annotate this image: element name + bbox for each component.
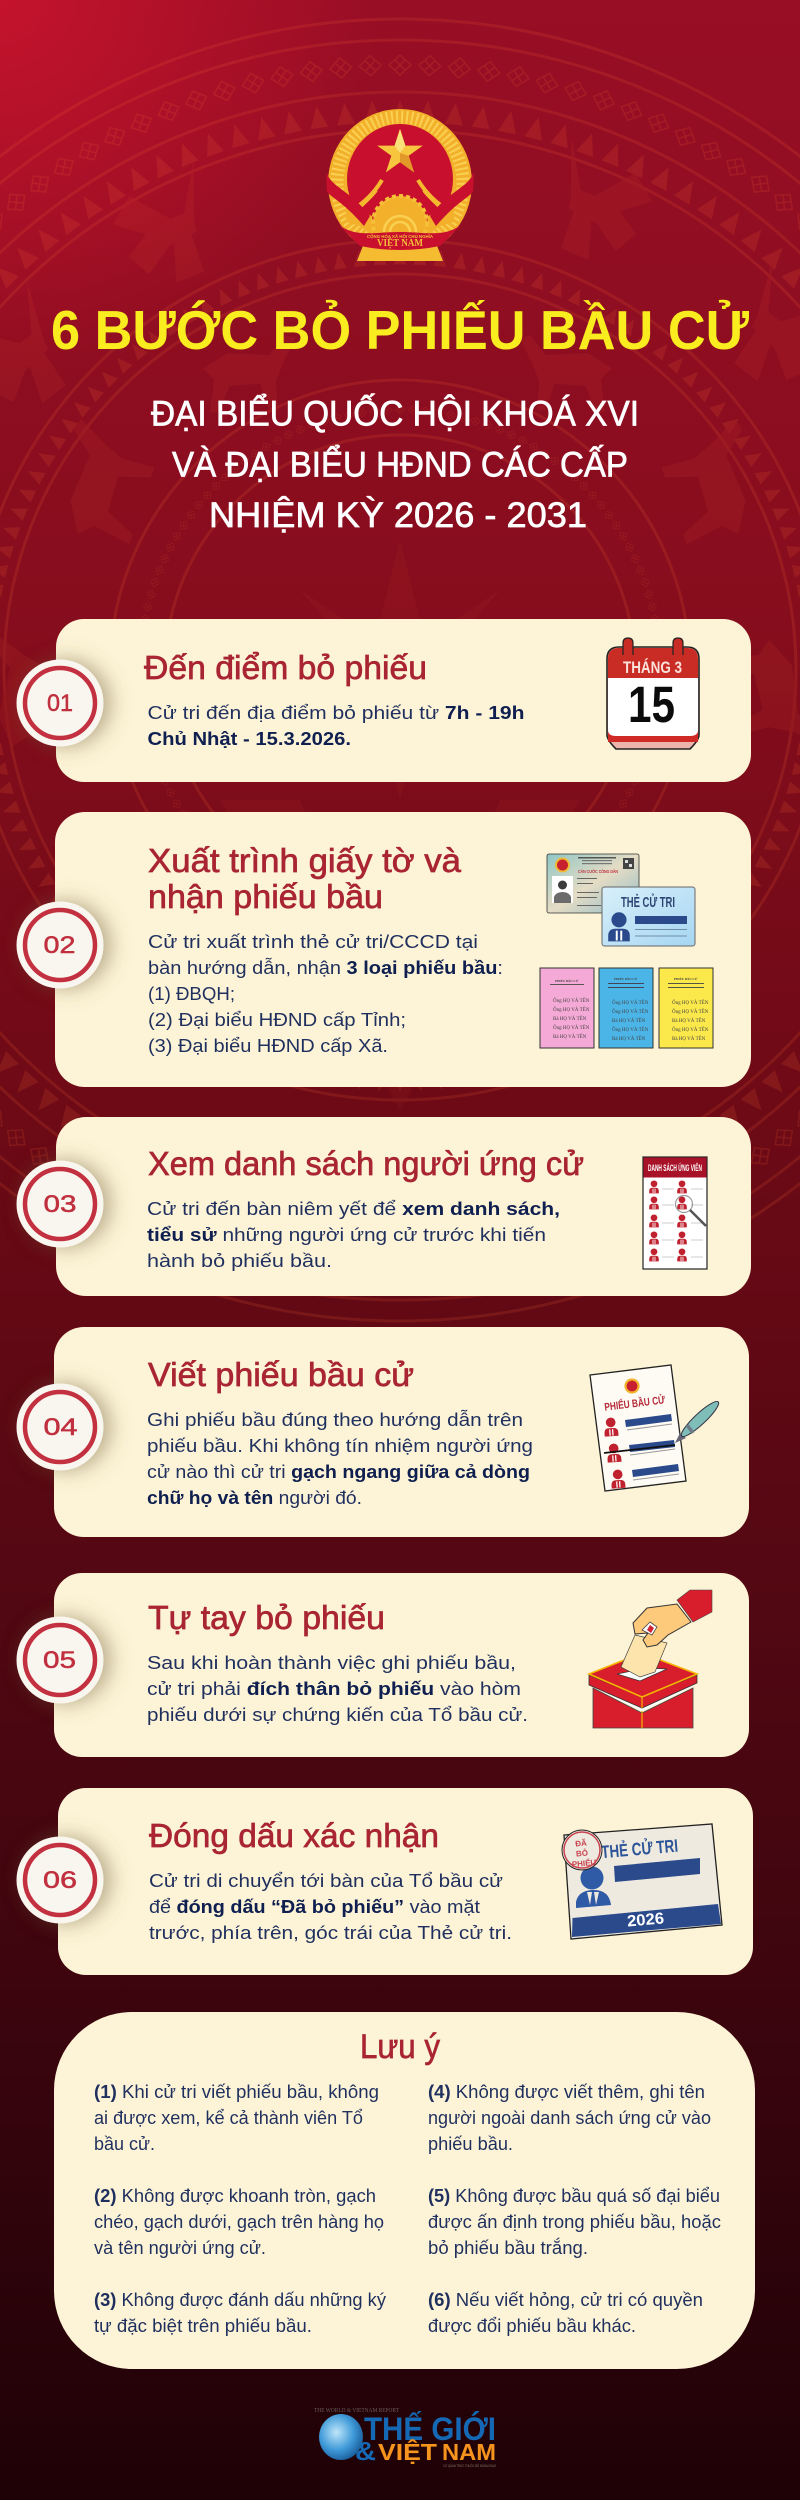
icon: stamped voter card: 2026 [626,1910,665,1931]
step number 06: 06 [43,1867,77,1894]
step number 06 [16,1836,104,1924]
icon: blue ballot: Ông HỌ VÀ TÊN [612,1000,649,1006]
text block: Cử tri di chuyển tới bàn của Tổ bầu cử [149,1870,503,1891]
step number 02 [16,902,104,988]
icon: yellow ballot: Ông HỌ VÀ TÊN [672,1027,709,1033]
text block: Sau khi hoàn thành việc ghi phiếu bầu, [147,1652,516,1673]
icon: pink ballot: PHIẾU BẦU CỬ [555,978,579,983]
text block: trước, phía trên, góc trái của Thẻ cử tri. [149,1922,512,1943]
icon: blue ballot: Ông HỌ VÀ TÊN [612,1009,649,1015]
text block [147,1409,533,1508]
icon: candidate list: DANH SÁCH ỨNG VIÊN [648,1162,702,1173]
logo: THẾ GIỚI [364,2411,496,2447]
text block: Cử tri xuất trình thẻ cử tri/CCCD tại [148,931,478,952]
icon: pink ballot: Bà HỌ VÀ TÊN [553,1034,587,1040]
logo: & [355,2436,376,2466]
notes column 2: (5) Không được bầu quá số đại biểu [428,2185,720,2206]
notes column 2: bỏ phiếu bầu trắng. [428,2237,588,2258]
panel: step 1 [16,619,751,782]
heading: nhận phiếu bầu [148,879,383,916]
icon: citizen id card [547,854,639,913]
text block: phiếu bầu. Khi không tín nhiệm người ứng [147,1435,533,1456]
text block: Cử tri đến địa điểm bỏ phiếu từ 7h - 19h [148,702,524,723]
icon: writing on ballot: PHIẾU BẦU CỬ [604,1393,666,1414]
icon: yellow ballot: Bà HỌ VÀ TÊN [672,1036,706,1042]
text block: phiếu dưới sự chứng kiến của Tổ bầu cử. [147,1704,528,1725]
icon: stamped voter card: THẺ CỬ TRI [600,1835,679,1862]
notes column 2: được đổi phiếu bầu khác. [428,2315,636,2336]
logo: THE WORLD & VIETNAM REPORT [314,2408,399,2414]
subtitle: ĐẠI BIỂU QUỐC HỘI KHOÁ XVI [151,394,639,434]
icon: pink ballot: Ông HỌ VÀ TÊN [553,998,590,1004]
step number 03: 03 [44,1191,76,1218]
subtitle: VÀ ĐẠI BIỂU HĐND CÁC CẤP [172,444,628,484]
text block: bàn hướng dẫn, nhận 3 loại phiếu bầu : [148,957,503,978]
logo: NAM [442,2439,496,2465]
text block: tiểu sử những người ứng cử trước khi tiến [147,1224,546,1245]
icon: stamped voter card: ĐÃ [575,1838,587,1848]
icon: stamped voter card: PHIẾU [571,1857,597,1869]
text block [147,1198,560,1271]
text block: để đóng dấu “Đã bỏ phiếu” vào mặt [149,1896,480,1917]
icon: blue ballot: Ông HỌ VÀ TÊN [612,1027,649,1033]
icon: yellow ballot: Ông HỌ VÀ TÊN [672,1009,709,1015]
step number 04 [16,1384,104,1470]
icon: ballot box and hand [589,1590,712,1728]
heading: Đóng dấu xác nhận [149,1818,439,1855]
logo [314,2408,496,2468]
icon: blue ballot: Bà HỌ VÀ TÊN [612,1018,646,1024]
heading [148,843,461,916]
step number 05: 05 [43,1647,76,1674]
heading: Xuất trình giấy tờ và [148,843,461,880]
text block: cử tri phải đích thân bỏ phiếu vào hòm [147,1678,521,1699]
panel: step 6 [16,1788,753,1975]
icon: yellow ballot: Ông HỌ VÀ TÊN [672,1000,709,1006]
step number 04: 04 [44,1414,78,1441]
icon: pink ballot [540,968,594,1048]
panel: step 4 [16,1327,749,1537]
icon: calendar: THÁNG 3 [623,658,682,677]
subtitle: NHIỆM KỲ 2026 - 2031 [209,495,587,535]
notes column 2: phiếu bầu. [428,2133,513,2154]
icon: blue ballot: Bà HỌ VÀ TÊN [612,1036,646,1042]
icon: pink ballot: Ông HỌ VÀ TÊN [553,1007,590,1013]
subtitle [151,394,639,535]
text block [148,702,524,749]
notes column 1: tự đặc biệt trên phiếu bầu. [94,2315,312,2336]
bronze drum pattern [0,0,800,1415]
step number 01 [16,660,104,746]
notes column 2: người ngoài danh sách ứng cử vào [428,2107,711,2128]
icon: stamped voter card [562,1824,722,1939]
step number 01: 01 [47,690,73,717]
notes column 1: và tên người ứng cử. [94,2237,266,2258]
national emblem: VIỆT NAM [377,236,424,249]
notes column 1: (3) Không được đánh dấu những ký [94,2289,387,2310]
text block: (2) Đại biểu HĐND cấp Tỉnh; [148,1009,406,1030]
icon: blue ballot [599,968,653,1048]
notes column 2: (4) Không được viết thêm, ghi tên [428,2081,705,2102]
icon: yellow ballot: PHIẾU BẦU CỬ [674,976,698,981]
text block [147,1652,528,1725]
icon: writing on ballot [590,1365,722,1491]
icon: voter card [602,887,695,946]
national emblem: CỘNG HÒA XÃ HỘI CHỦ NGHĨA [367,232,434,239]
panel: notes [54,2012,755,2369]
icon: stamped voter card: BỎ [576,1848,588,1859]
notes column 1: (1) Khi cử tri viết phiếu bầu, không [94,2081,379,2102]
icon: yellow ballot [659,968,713,1048]
notes column 2: được ấn định trong phiếu bầu, hoặc [428,2211,721,2232]
title: 6 BƯỚC BỎ PHIẾU BẦU CỬ [51,299,749,361]
heading: Viết phiếu bầu cử [148,1357,414,1394]
text block: (3) Đại biểu HĐND cấp Xã. [148,1035,388,1056]
heading: Tự tay bỏ phiếu [148,1600,385,1637]
notes column 1: chéo, gạch dưới, gạch trên hàng họ [94,2211,384,2232]
step number 03 [16,1160,104,1248]
text block: Cử tri đến bàn niêm yết để xem danh sách, [147,1198,560,1219]
logo: VIỆT [378,2438,437,2465]
notes column 1: ai được xem, kể cả thành viên Tổ [94,2107,363,2128]
heading: Xem danh sách người ứng cử [148,1146,584,1183]
panel: step 2 [16,812,751,1087]
notes column 1: (2) Không được khoanh tròn, gạch [94,2185,376,2206]
text block: Ghi phiếu bầu đúng theo hướng dẫn trên [147,1409,523,1430]
text block [149,1870,512,1943]
icon: candidate list [643,1157,707,1269]
panel: step 5 [16,1573,749,1757]
notes column 2 [428,2081,721,2336]
notes column 1 [94,2081,387,2336]
text block: chữ họ và tên người đó. [147,1487,362,1508]
icon: pink ballot: Ông HỌ VÀ TÊN [553,1025,590,1031]
panel: step 3 [16,1117,751,1296]
icon: blue ballot: PHIẾU BẦU CỬ [614,976,638,981]
text block: Chủ Nhật - 15.3.2026. [148,728,351,749]
icon: yellow ballot: Bà HỌ VÀ TÊN [672,1018,706,1024]
national emblem [326,109,474,261]
text block: cử nào thì cử tri gạch ngang giữa cả dòng [147,1461,530,1482]
text block: (1) ĐBQH; [148,983,235,1004]
heading: Đến điểm bỏ phiếu [144,650,427,687]
logo: CƠ QUAN TRỰC THUỘC BỘ NGOẠI GIAO [443,2463,496,2468]
heading: notes: Lưu ý [360,2028,440,2066]
notes column 1: bầu cử. [94,2133,155,2154]
step number 05 [16,1616,104,1704]
icon: calendar: 15 [628,676,675,733]
text block: hành bỏ phiếu bầu. [147,1250,332,1271]
text block [148,931,503,1056]
icon: pink ballot: Bà HỌ VÀ TÊN [553,1016,587,1022]
icon: voter card: THẺ CỬ TRI [621,893,675,911]
notes column 2: (6) Nếu viết hỏng, cử tri có quyền [428,2289,703,2310]
icon: citizen id card: CĂN CƯỚC CÔNG DÂN [578,867,618,875]
icon: calendar [607,638,699,749]
step number 02: 02 [44,932,76,959]
